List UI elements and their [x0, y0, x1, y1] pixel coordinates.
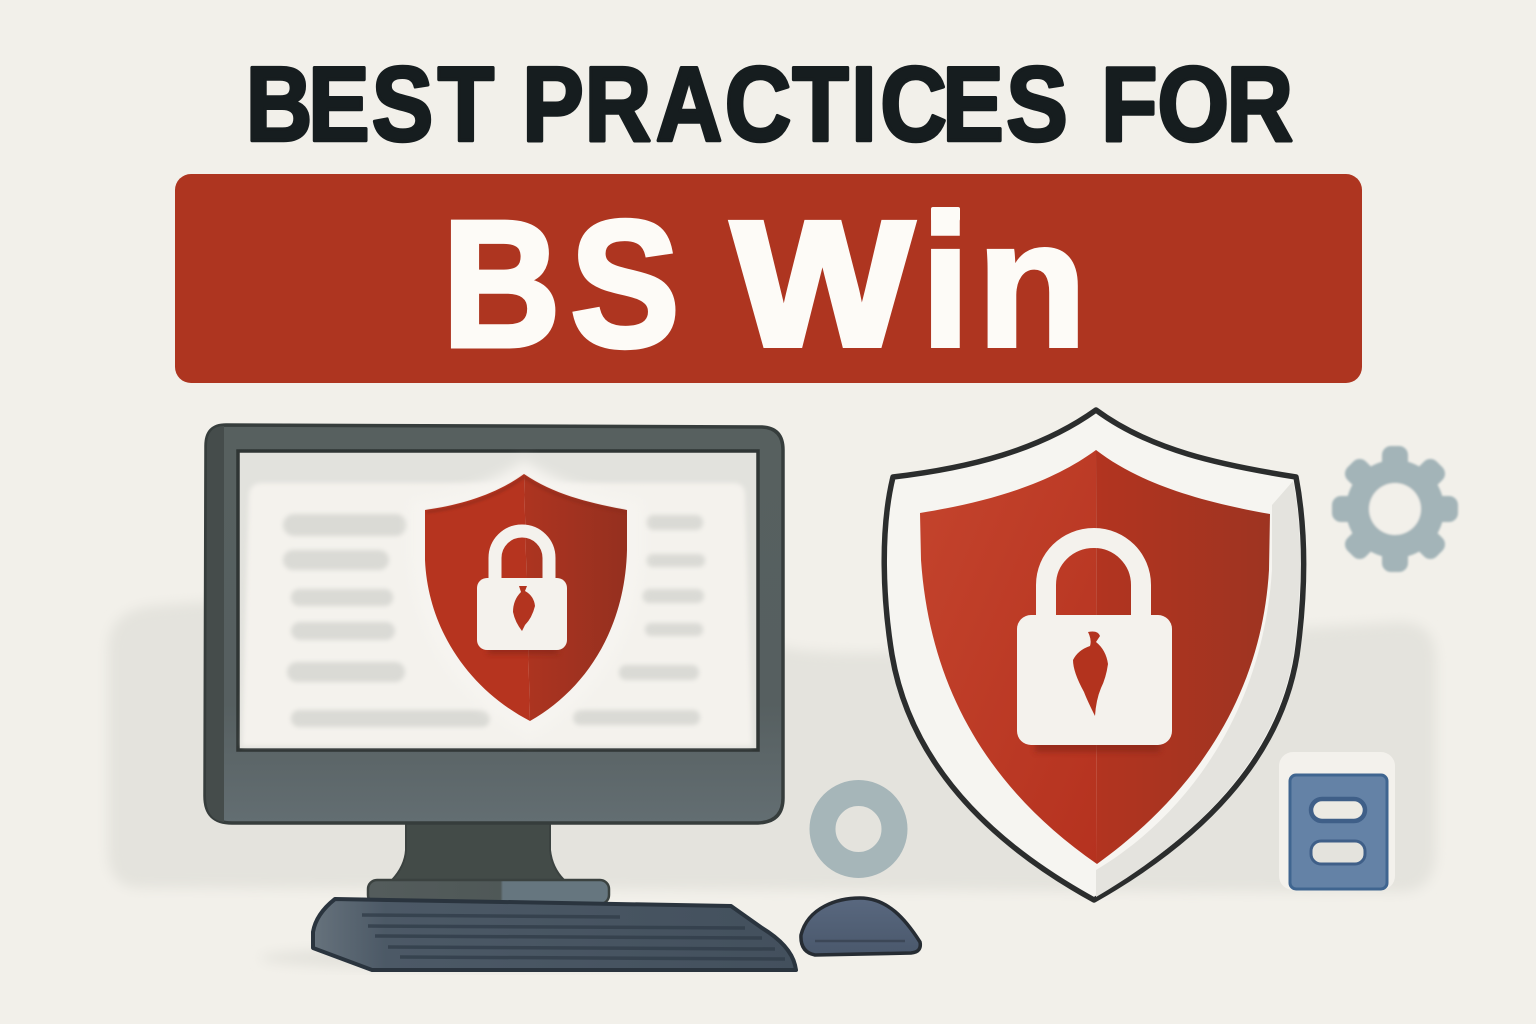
monitor body [205, 425, 783, 823]
screen [238, 451, 758, 750]
banner heading: W [733, 185, 913, 382]
small shield top shading [427, 477, 625, 512]
mouse body [801, 898, 920, 955]
blurred text lines [283, 514, 705, 727]
small shield right half [524, 474, 627, 721]
device body [1290, 775, 1387, 889]
large shield [884, 410, 1304, 900]
banner heading: BS [442, 184, 680, 385]
red banner [175, 174, 1362, 385]
background shadow panel [108, 600, 1436, 892]
keyboard key rows [362, 915, 785, 959]
padlock shadow [1035, 740, 1160, 752]
gear centre [1369, 483, 1421, 535]
gear hub [1358, 472, 1432, 546]
monitor stand base [368, 880, 609, 904]
small padlock body [477, 578, 567, 650]
banner heading: in [920, 184, 1087, 385]
shield red right half [1096, 450, 1270, 864]
gear teeth [1332, 446, 1458, 572]
mouse lower line [815, 940, 905, 942]
gear icon [1332, 446, 1458, 572]
small padlock [477, 531, 567, 654]
storage device icon [1279, 752, 1395, 890]
desktop monitor illustration [205, 425, 783, 904]
monitor left edge shading [206, 426, 224, 822]
mouse icon [801, 898, 920, 955]
title: best practices for: BEST PRACTICES FOR [246, 46, 1293, 164]
padlock shackle [1046, 538, 1141, 622]
shield outer white [884, 410, 1304, 900]
keyboard shadow [260, 946, 740, 970]
device bottom slot [1311, 841, 1365, 864]
small keyhole [513, 586, 535, 631]
small padlock shadow [488, 644, 558, 654]
small shield left half [425, 474, 530, 721]
small padlock shackle [495, 531, 549, 584]
padlock [1017, 538, 1172, 752]
ring icon [822, 793, 894, 865]
padlock body [1017, 615, 1172, 745]
monitor stand [392, 822, 564, 880]
keyboard illustration [260, 899, 796, 970]
keyhole [1073, 632, 1108, 716]
shield red left half [920, 450, 1097, 864]
small shield glow [410, 460, 642, 738]
page card on screen [242, 483, 752, 746]
keyboard body [313, 899, 796, 970]
shield right bevel [1096, 481, 1300, 897]
banner heading [442, 184, 1087, 385]
device top slot [1311, 799, 1365, 821]
device glow [1279, 752, 1395, 890]
